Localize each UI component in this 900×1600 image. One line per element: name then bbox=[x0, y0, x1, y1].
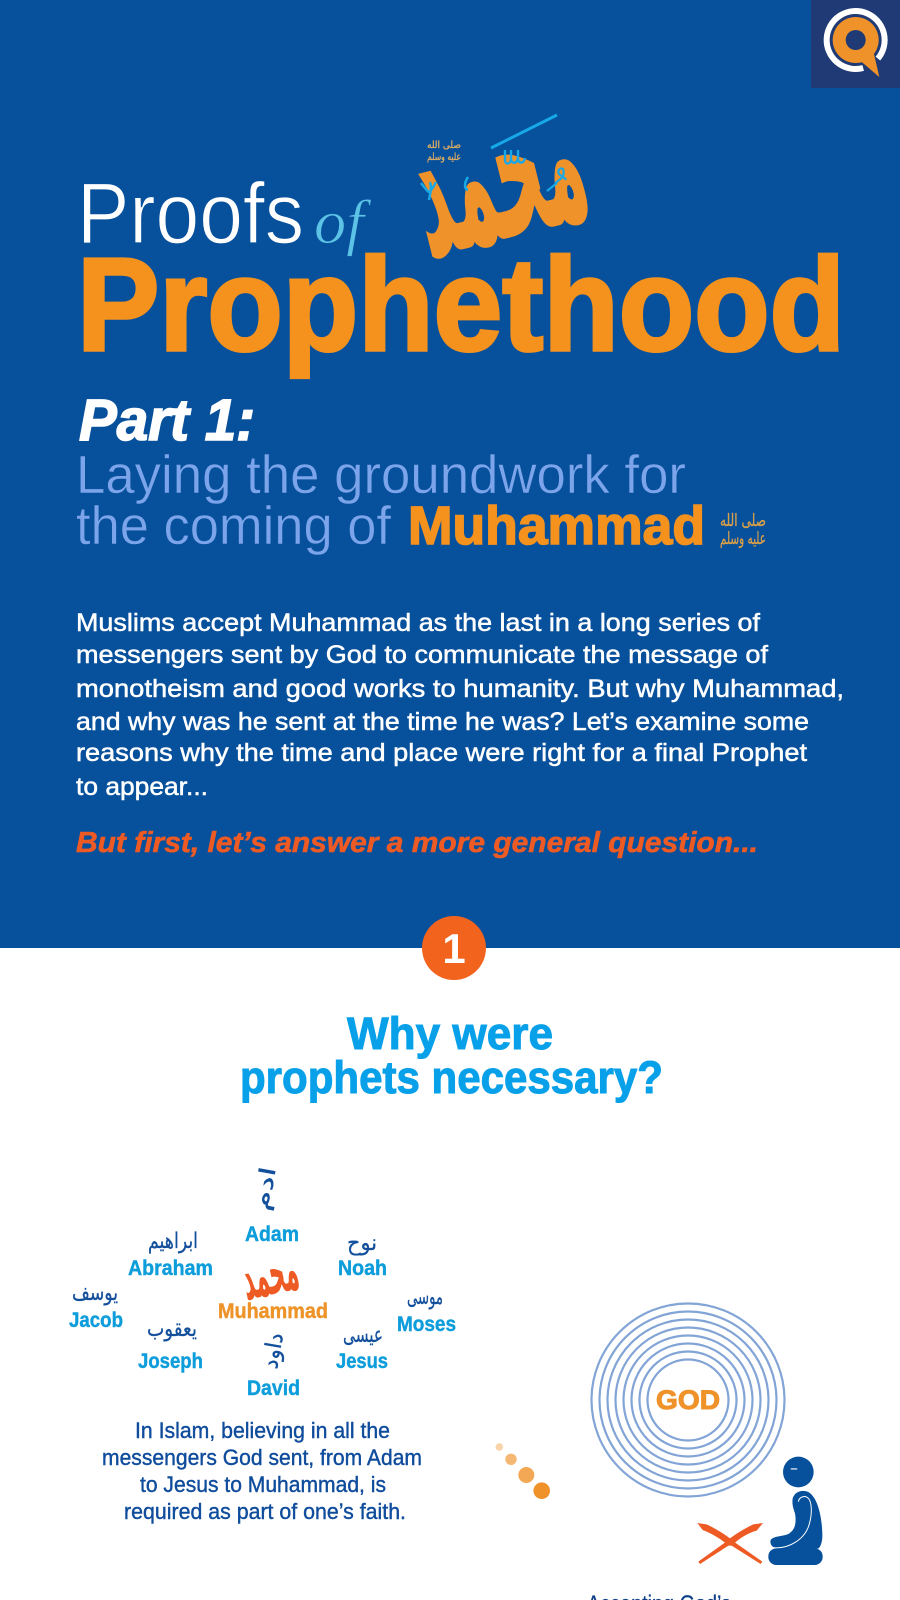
Noah: نوح bbox=[347, 1231, 377, 1256]
Moses: موسى bbox=[407, 1285, 443, 1310]
messengers paragraph: messengers God sent, from Adam bbox=[102, 1445, 422, 1470]
background: blue header panel bbox=[0, 0, 900, 948]
subtitle: صلى الله bbox=[720, 511, 766, 531]
logo bbox=[811, 0, 900, 88]
subtitle: the coming of bbox=[76, 496, 392, 556]
icon: praying figure with book bbox=[697, 1457, 823, 1565]
calligraphy: Muhammad: صلى الله bbox=[427, 140, 461, 151]
lead-in question: But first, let’s answer a more general question... bbox=[76, 827, 758, 859]
David: David bbox=[247, 1377, 300, 1400]
Muhammad: محمد bbox=[235, 1232, 304, 1314]
calligraphy: Muhammad: عليه وسلم bbox=[427, 152, 461, 163]
Jacob: Jacob bbox=[69, 1309, 123, 1332]
section heading bbox=[240, 1008, 663, 1103]
Jesus: Jesus bbox=[336, 1350, 388, 1373]
figure bbox=[768, 1457, 823, 1565]
subtitle: Muhammad bbox=[408, 496, 705, 556]
Moses bbox=[397, 1285, 456, 1336]
calligraphy: Muhammad: محمد bbox=[384, 38, 607, 303]
Abraham: ابراهيم bbox=[148, 1229, 198, 1254]
David: داود bbox=[258, 1331, 289, 1371]
messengers paragraph: In Islam, believing in all the bbox=[135, 1418, 390, 1443]
Jacob bbox=[69, 1281, 123, 1332]
Joseph: يعقوب bbox=[147, 1317, 197, 1342]
intro paragraph: to appear... bbox=[76, 773, 208, 801]
intro paragraph bbox=[76, 609, 844, 801]
title: Prophethood bbox=[77, 231, 845, 378]
Noah bbox=[338, 1231, 387, 1280]
Jesus bbox=[336, 1323, 388, 1373]
prophets name cluster bbox=[69, 1165, 456, 1400]
icon: concentric rings with GOD bbox=[592, 1304, 784, 1496]
subtitle: Part 1: bbox=[79, 388, 255, 453]
icon: concentric rings with GOD: GOD bbox=[656, 1385, 720, 1415]
David bbox=[247, 1331, 300, 1400]
book on stand bbox=[697, 1523, 763, 1564]
Abraham: Abraham bbox=[128, 1257, 213, 1280]
section heading: prophets necessary? bbox=[240, 1052, 663, 1103]
Muhammad bbox=[218, 1232, 328, 1323]
messengers paragraph bbox=[102, 1418, 422, 1524]
messengers paragraph: required as part of one’s faith. bbox=[124, 1499, 406, 1524]
Joseph: Joseph bbox=[138, 1350, 203, 1373]
intro paragraph: Muslims accept Muhammad as the last in a long series of bbox=[76, 609, 760, 637]
Adam: ادم bbox=[249, 1165, 282, 1213]
Muhammad: Muhammad bbox=[218, 1300, 328, 1323]
intro paragraph: and why was he sent at the time he was? Let’s examine some bbox=[76, 708, 809, 736]
Adam: Adam bbox=[245, 1223, 299, 1246]
title bbox=[77, 166, 845, 378]
Jesus: عيسى bbox=[343, 1323, 383, 1348]
Noah: Noah bbox=[338, 1257, 387, 1280]
intro paragraph: messengers sent by God to communicate the message of bbox=[76, 641, 768, 669]
Jacob: يوسف bbox=[72, 1281, 118, 1306]
calligraphy: Muhammad bbox=[384, 38, 607, 303]
intro paragraph: reasons why the time and place were right for a final Prophet bbox=[76, 739, 807, 767]
Moses: Moses bbox=[397, 1313, 456, 1336]
subtitle: Laying the groundwork for bbox=[76, 445, 686, 505]
messengers paragraph: to Jesus to Muhammad, is bbox=[140, 1472, 386, 1497]
icon: fading orange dots bbox=[496, 1443, 550, 1499]
title: Proofs bbox=[77, 166, 304, 262]
intro paragraph: monotheism and good works to humanity. But why Muhammad, bbox=[76, 675, 844, 703]
Abraham bbox=[128, 1229, 213, 1280]
subtitle bbox=[76, 388, 766, 556]
number badge 1 bbox=[422, 916, 486, 980]
number badge 1: 1 bbox=[442, 925, 466, 972]
subtitle: عليه وسلم bbox=[720, 529, 766, 549]
title: of bbox=[314, 189, 372, 257]
Adam bbox=[245, 1165, 299, 1246]
Joseph bbox=[138, 1317, 203, 1373]
section heading: Why were bbox=[347, 1008, 553, 1059]
